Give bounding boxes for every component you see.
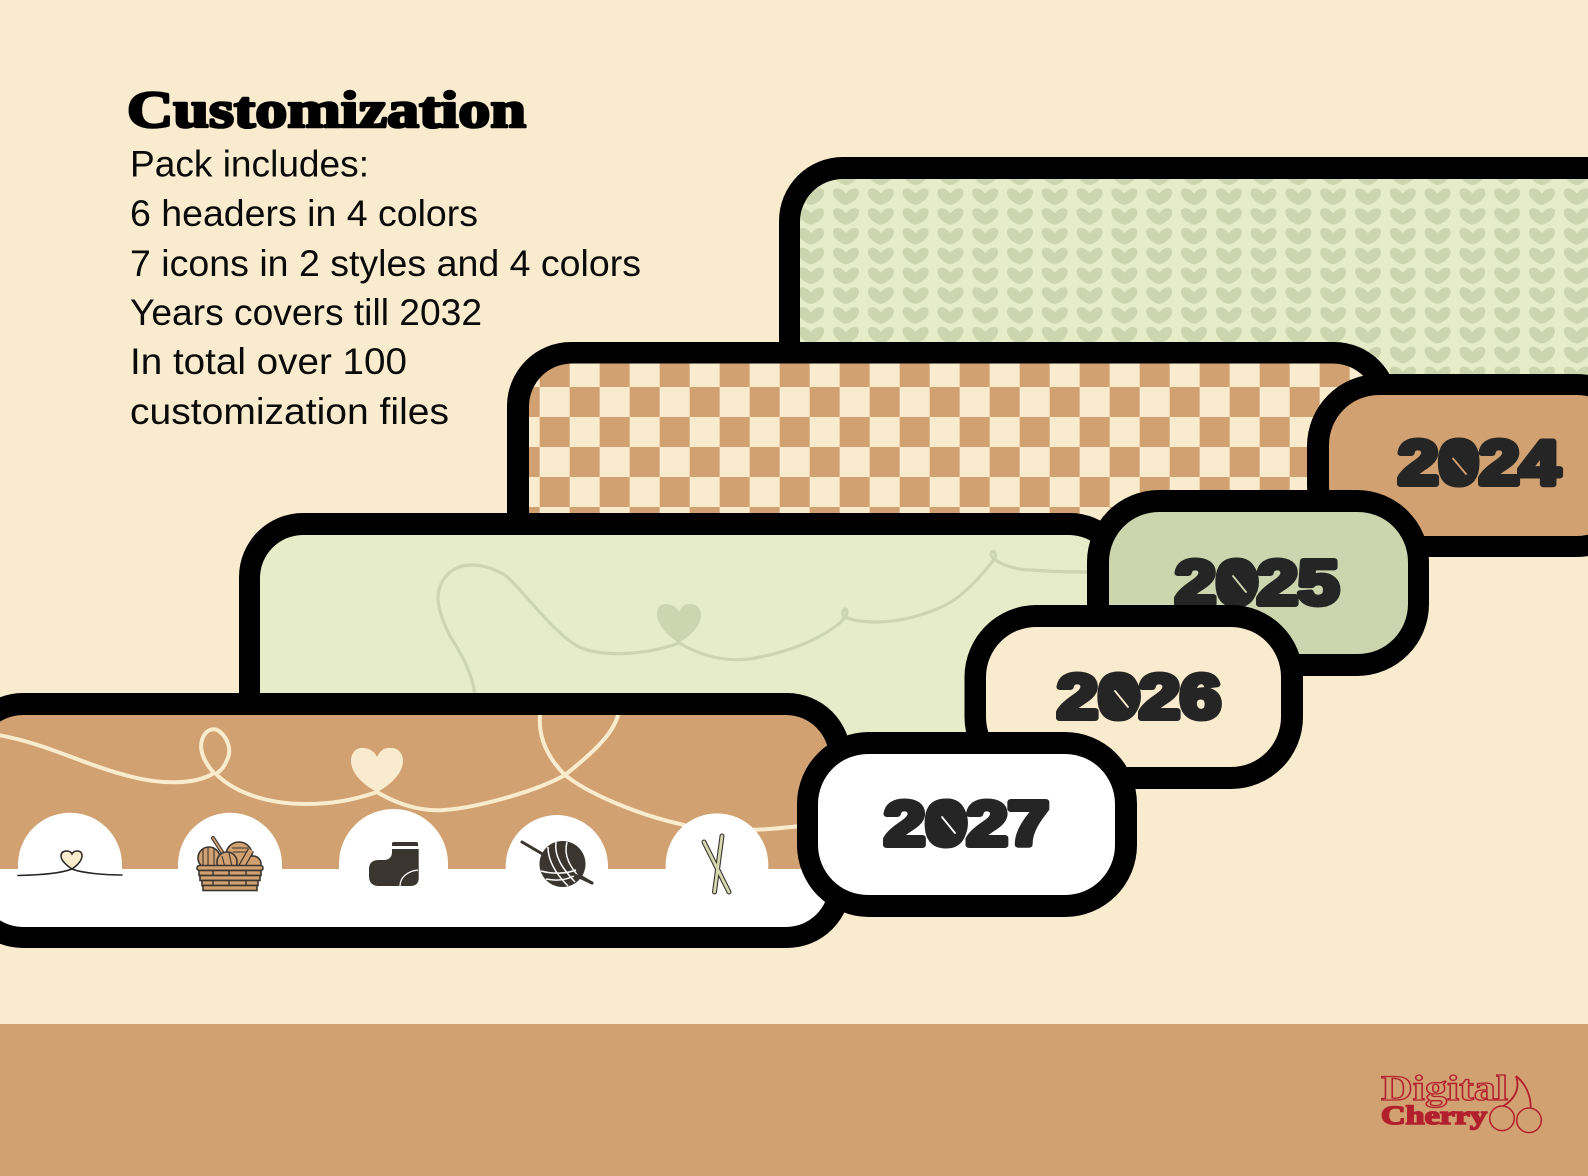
- icon arch: crochet hooks: [666, 813, 768, 892]
- bottom band: [0, 1024, 1588, 1176]
- text block: pack contents: In total over 100: [130, 340, 407, 382]
- icon arch: sock: [339, 809, 448, 886]
- logo: Digital Cherry: Cherry: [1381, 1101, 1487, 1130]
- year tab: 2026: 2026: [1057, 663, 1221, 732]
- icon arch: yarn basket: [178, 813, 282, 891]
- text block: pack contents: Years covers till 2032: [130, 291, 482, 333]
- year tab: 2026: [964, 605, 1303, 789]
- icon arch: heart thread: [18, 813, 122, 876]
- logo: Digital Cherry: [1381, 1068, 1541, 1133]
- year tab: 2027: 2027: [884, 790, 1049, 859]
- year tab: 2025: 2025: [1175, 549, 1339, 618]
- panel: plain green header with yarn line: [239, 513, 1100, 736]
- logo: Digital Cherry: Digital: [1381, 1068, 1508, 1108]
- text block: pack contents: 7 icons in 2 styles and 4 colors: [130, 242, 641, 284]
- yarn line and heart: [0, 715, 800, 830]
- year tab: 2027: [797, 732, 1137, 917]
- text block: pack contents: Pack includes:: [130, 143, 369, 185]
- year tab: 2024: [1307, 374, 1588, 557]
- icon arch: yarn ball with hook: [506, 815, 608, 887]
- text block: pack contents: 6 headers in 4 colors: [130, 192, 478, 234]
- text block: pack contents: customization files: [130, 390, 449, 432]
- panel: checkerboard header: [507, 342, 1398, 600]
- year tab: 2024: 2024: [1398, 429, 1561, 498]
- yarn line and heart: [438, 551, 1090, 695]
- text block: pack contents: [130, 143, 641, 432]
- panel: heart pattern header: [779, 157, 1588, 457]
- title: Customization: [127, 82, 526, 139]
- panel: tan header with icons: [0, 693, 851, 948]
- year tab: 2025: [1087, 490, 1429, 676]
